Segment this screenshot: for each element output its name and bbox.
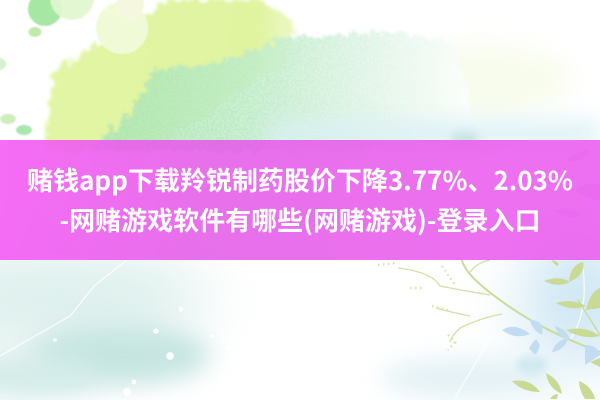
wash: lower left teal bbox=[0, 250, 210, 398]
pink title band bbox=[0, 140, 600, 260]
green leaves bbox=[512, 260, 600, 399]
pale streaks lower right bbox=[455, 262, 584, 398]
title bbox=[27, 161, 573, 238]
wash: pale blue along band top bbox=[270, 122, 600, 146]
title: 赌钱app下载羚锐制药股价下降3.77%、2.03% bbox=[27, 161, 573, 198]
wash: right blue bbox=[380, 45, 600, 398]
blue leaves bbox=[502, 320, 600, 365]
paint splash: yellow green bbox=[46, 0, 295, 150]
title: -网赌游戏软件有哪些(网赌游戏)-登录入口 bbox=[60, 201, 540, 238]
flowering branch bbox=[378, 260, 600, 352]
purple tint sprigs behind band bbox=[555, 150, 600, 218]
bubbles top left bbox=[0, 0, 148, 135]
white sparkle line and dots bbox=[0, 260, 229, 396]
paint splash: soft green bbox=[90, 33, 480, 150]
